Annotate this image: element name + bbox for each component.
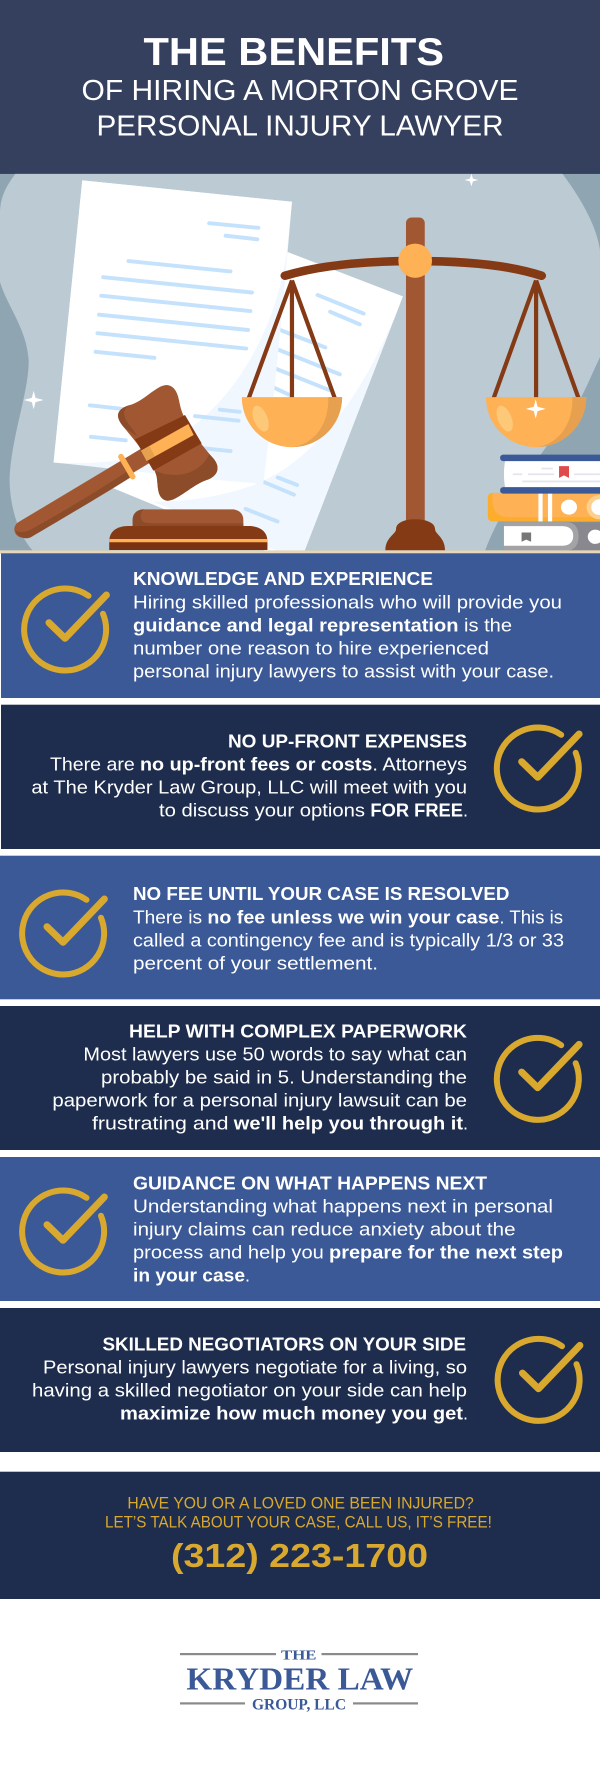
text block: number one reason to hire experienced [133,638,489,658]
text block: frustrating and [92,1113,228,1133]
icon: check circle [24,588,106,670]
text block: called a contingency fee and is typically 1/3 or 33 [133,930,564,950]
text block: There are [50,754,135,774]
text block [133,592,562,681]
call to action text [105,1494,492,1532]
logo: THE [281,1648,316,1663]
heading: NO FEE UNTIL YOUR CASE IS RESOLVED [133,884,509,904]
text block: no fee unless we win your case [207,907,499,927]
left pan [242,397,342,447]
text block: . Attorneys [372,754,467,774]
icon: check circle [22,1190,104,1272]
text block [133,1196,563,1286]
logo [180,1648,418,1713]
text block [32,1357,468,1423]
icon: check circle [498,1339,580,1421]
text block [52,1044,468,1133]
title: PERSONAL INJURY LAWYER [96,111,504,143]
text block: There is [133,907,202,927]
text block: . [463,1113,468,1133]
heading: KNOWLEDGE AND EXPERIENCE [133,569,433,589]
illustration: legal scene [0,174,600,554]
text block: Understanding what happens next in personal [133,1196,553,1216]
panel: no up-front expenses [1,705,600,849]
heading: GUIDANCE ON WHAT HAPPENS NEXT [133,1173,487,1193]
sparkles [24,174,546,419]
heading: SKILLED NEGOTIATORS ON YOUR SIDE [102,1334,466,1354]
gavel block [109,509,267,550]
text block: . [463,800,468,820]
table edge [0,550,600,554]
text block: at The Kryder Law Group, LLC will meet with you [31,777,467,797]
text block: in your case [133,1266,245,1286]
balance scale [242,217,586,550]
text block: . This is [499,907,563,927]
gavel [15,385,218,538]
text block: Hiring skilled professionals who will provide you [133,592,562,612]
heading: HELP WITH COMPLEX PAPERWORK [129,1021,467,1041]
text block: no up-front fees or costs [140,754,372,774]
text block: . [245,1266,250,1286]
text block: is the [464,615,512,635]
text block [133,907,564,973]
panel: no fee until resolved [0,856,600,999]
title [82,31,518,143]
front paper [54,180,292,484]
call to action text: LET’S TALK ABOUT YOUR CASE, CALL US, IT’S FREE! [105,1513,492,1532]
back paper [107,252,403,552]
icon: check circle [22,892,104,974]
logo: GROUP, LLC [252,1696,346,1713]
text block: Most lawyers use 50 words to say what can [83,1044,467,1064]
text block: prepare for the next step [329,1242,563,1262]
text block: Personal injury lawyers negotiate for a living, so [43,1357,467,1377]
title: OF HIRING A MORTON GROVE [82,75,518,107]
title: THE BENEFITS [144,31,444,74]
text block: probably be said in 5. Understanding the [101,1067,467,1087]
text block: we'll help you through it [233,1113,463,1133]
heading: NO UP-FRONT EXPENSES [228,731,467,751]
header panel [0,0,600,174]
icon: check circle [497,727,579,809]
text block: to discuss your options [159,800,365,820]
phone number: (312) 223-1700 [171,1537,428,1574]
text block: . [463,1403,468,1423]
text block: personal injury lawyers to assist with your case. [133,661,554,681]
icon: check circle [497,1038,579,1120]
logo: KRYDER LAW [186,1660,413,1696]
text block: guidance and legal representation [133,615,458,635]
right pan [486,397,586,447]
text block: paperwork for a personal injury lawsuit can be [52,1090,467,1110]
call to action text: HAVE YOU OR A LOVED ONE BEEN INJURED? [127,1494,474,1513]
text block: FOR FREE [370,800,463,820]
panel: skilled negotiators [0,1308,600,1452]
text block: injury claims can reduce anxiety about the [133,1219,516,1239]
text block: percent of your settlement. [133,953,378,973]
panel: knowledge and experience [1,553,600,698]
panel: guidance on what happens next [0,1157,600,1301]
books [488,455,600,551]
text block [31,754,468,820]
text block: process and help you [133,1242,324,1262]
text block: maximize how much money you get [120,1403,463,1423]
panel: call to action [0,1472,600,1599]
text block: having a skilled negotiator on your side can help [32,1380,467,1400]
panel: help with complex paperwork [0,1006,600,1150]
